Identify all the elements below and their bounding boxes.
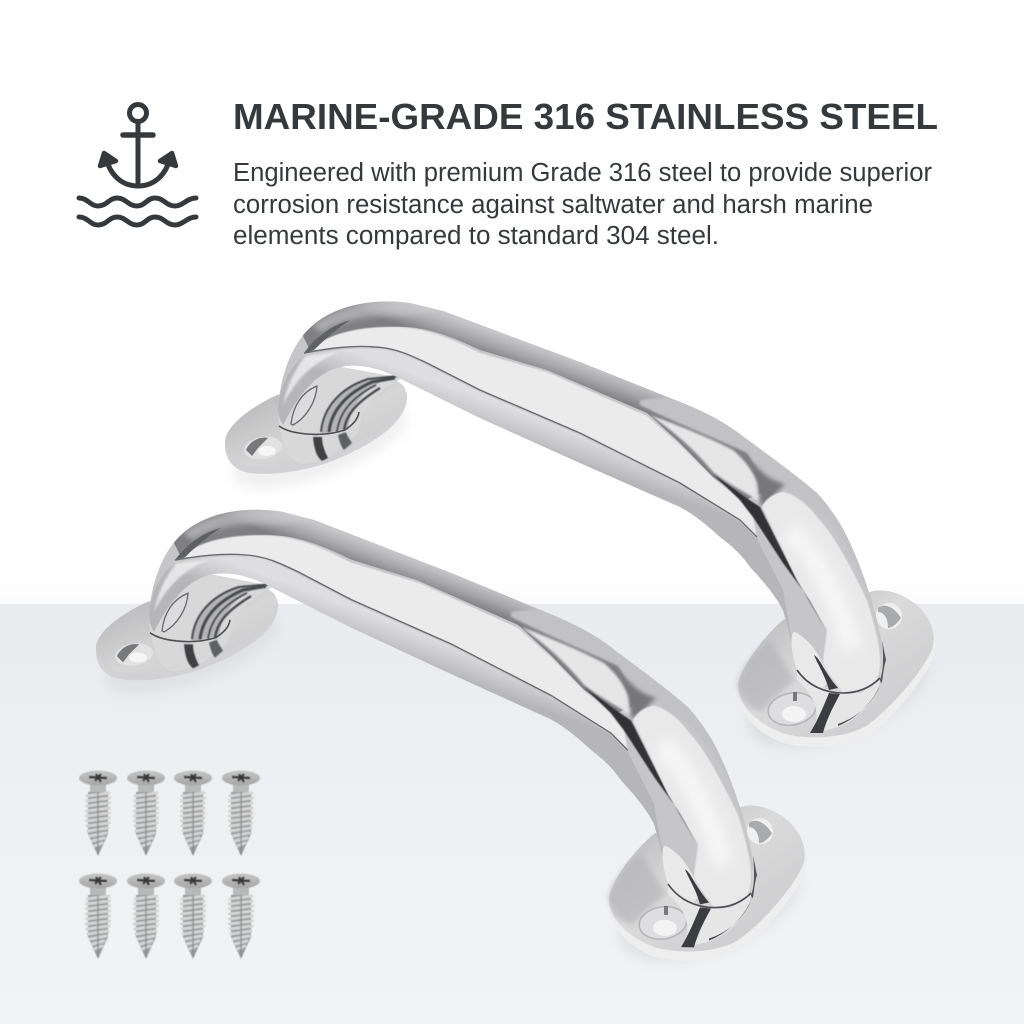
icon: anchor above waves (79, 104, 196, 225)
description text (233, 159, 932, 250)
description text: corrosion resistance against saltwater and harsh marine (233, 191, 873, 219)
mounting screws (79, 770, 260, 959)
back grab handle (223, 293, 943, 771)
description text: Engineered with premium Grade 316 steel to provide superior (233, 159, 932, 187)
front grab handle (94, 499, 814, 987)
background: lower grey surface (0, 604, 1024, 1024)
background: upper white area (0, 0, 1024, 605)
description text: elements compared to standard 304 steel. (233, 222, 719, 250)
title: MARINE-GRADE 316 STAINLESS STEEL (233, 96, 938, 137)
